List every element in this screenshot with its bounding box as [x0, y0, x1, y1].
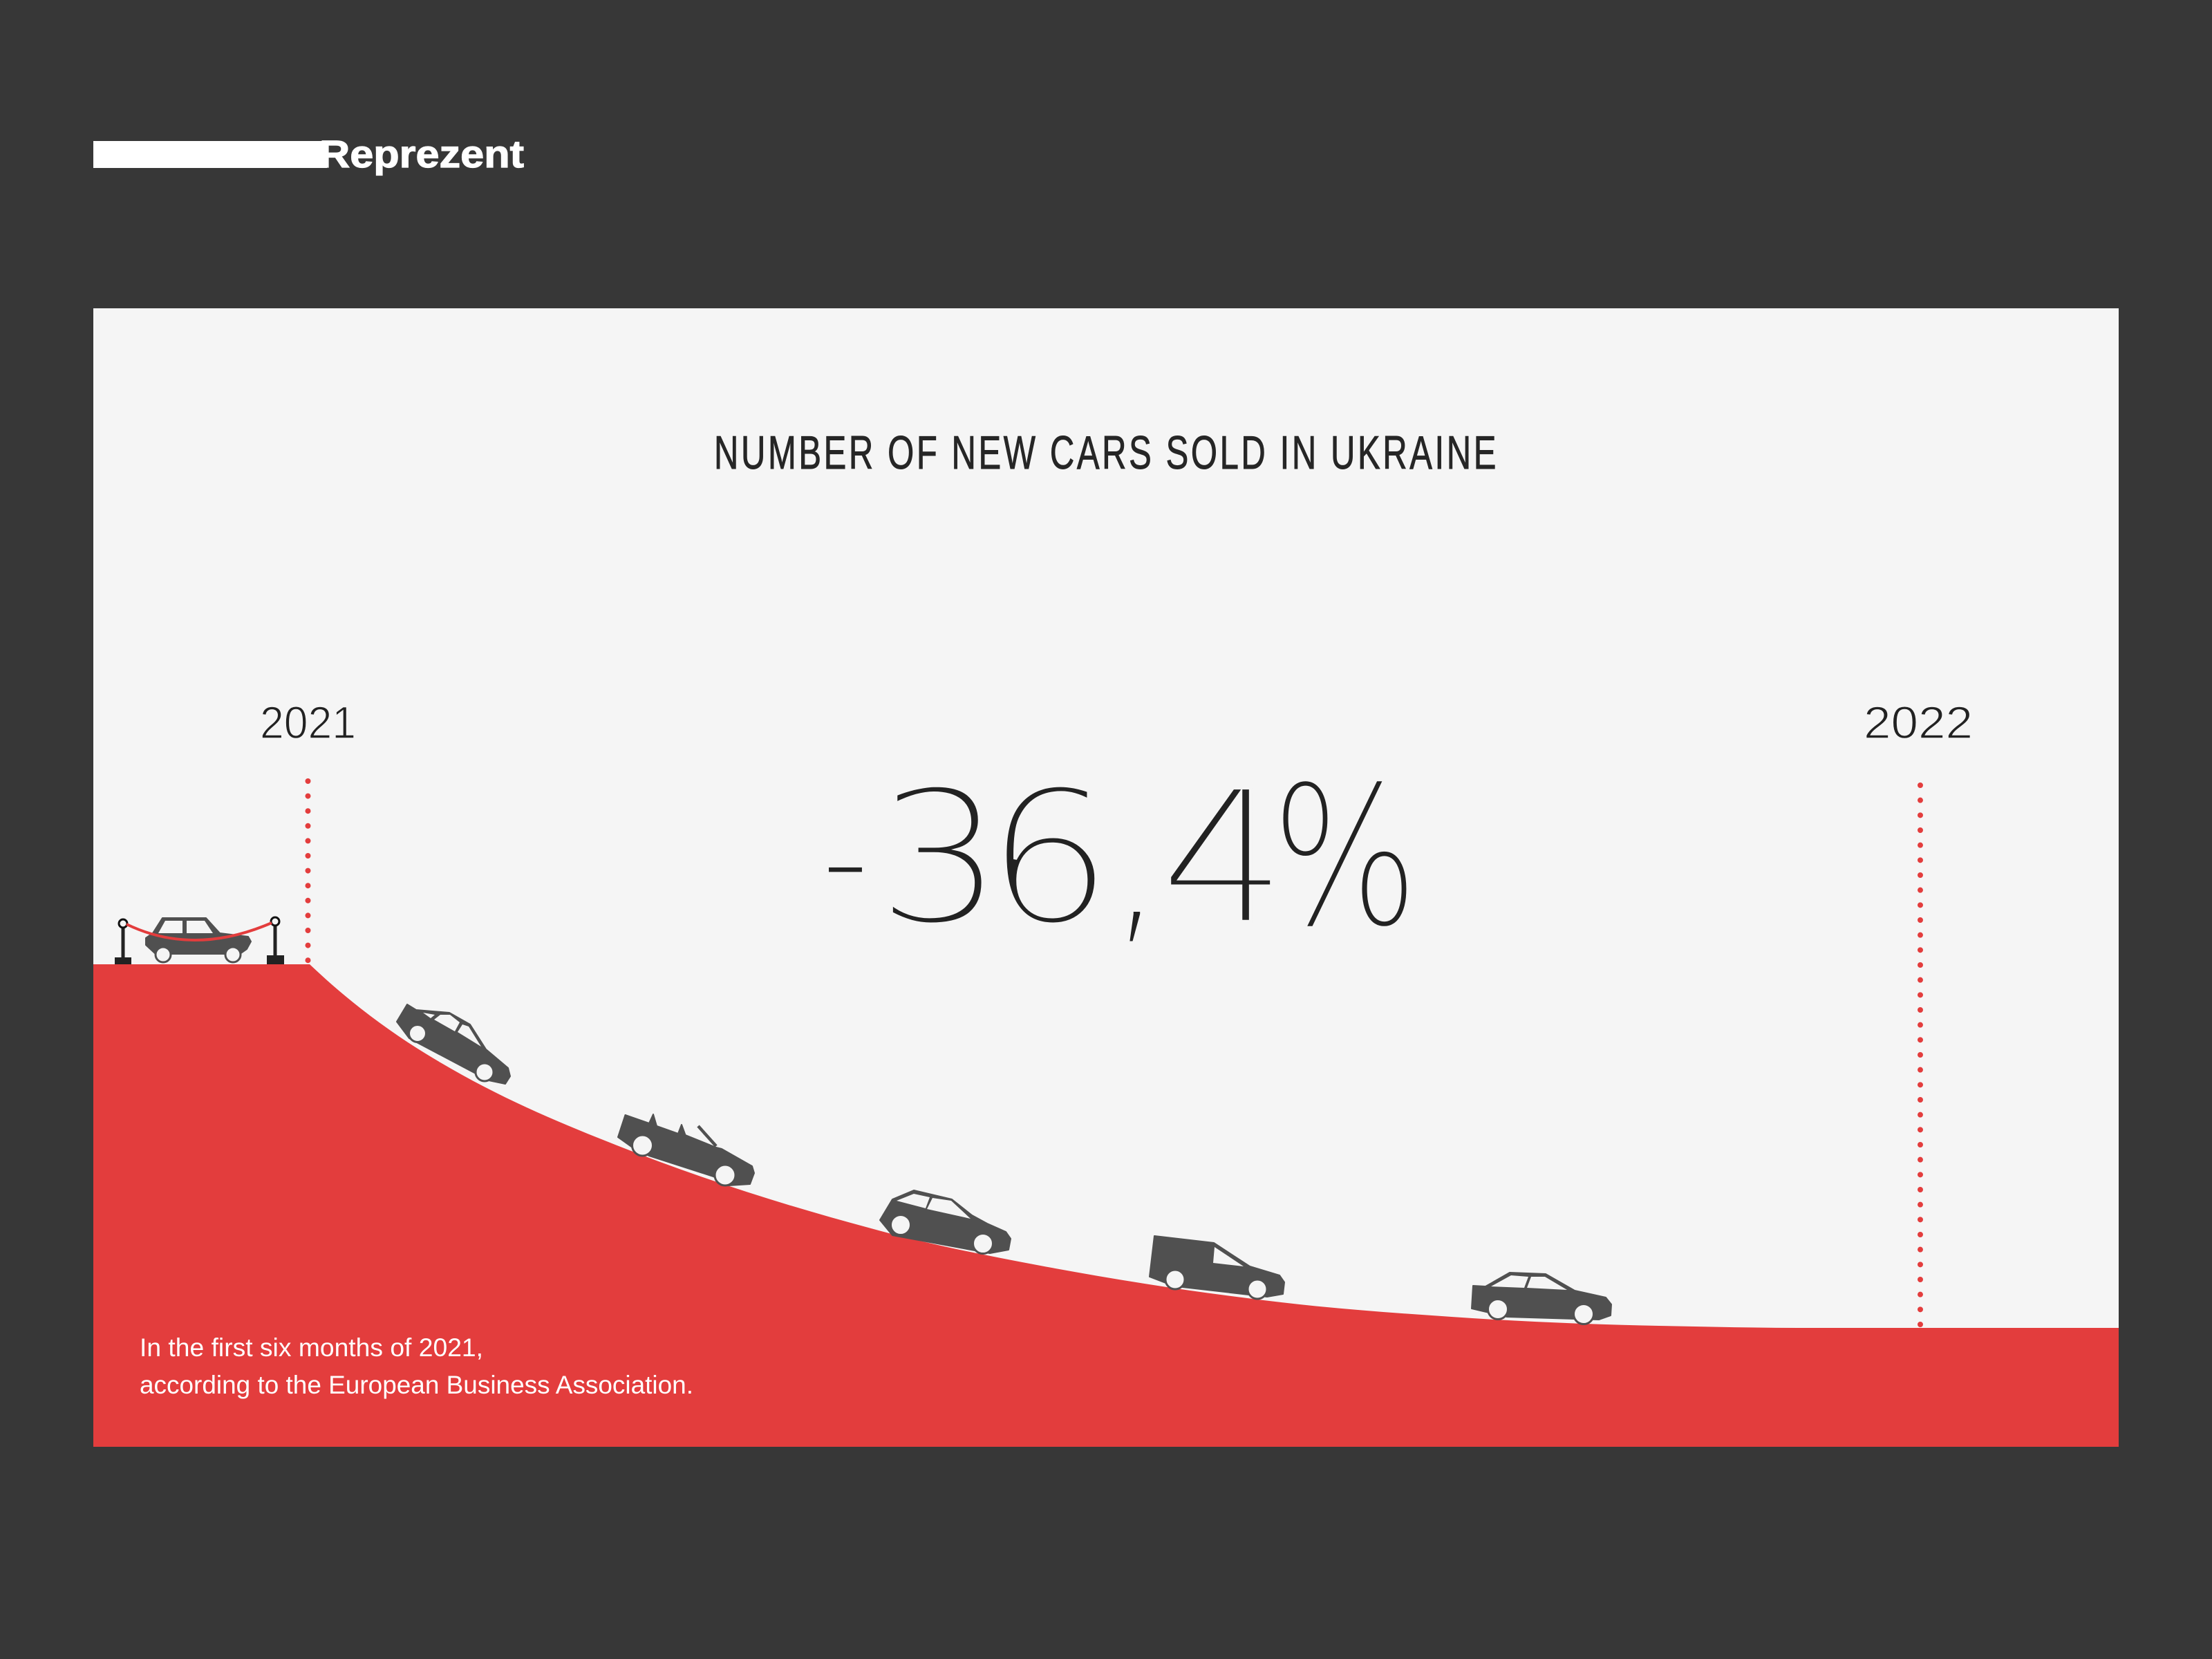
icon: van on slope [1150, 1236, 1284, 1299]
logo: Reprezent [319, 132, 524, 176]
year label 2021: 2021 [260, 697, 356, 748]
source note: according to the European Business Association. [140, 1371, 693, 1399]
icon: coupe on slope [1472, 1273, 1611, 1324]
year label 2022: 2022 [1864, 697, 1973, 748]
headline percentage [821, 744, 1419, 971]
source note: In the first six months of 2021, [140, 1333, 483, 1362]
icon: hatchback on slope [880, 1190, 1011, 1254]
panel: chart background [93, 308, 2119, 1447]
dotted marker 2022 [1918, 785, 1923, 1326]
headline percentage: % [1271, 744, 1419, 971]
logo [93, 132, 524, 176]
headline percentage: 36,4 [876, 751, 1288, 965]
title: NUMBER OF NEW CARS SOLD IN UKRAINE [714, 427, 1499, 479]
icon: sedan on slope [397, 1004, 510, 1084]
source note [140, 1333, 693, 1399]
icon: convertible on slope [618, 1114, 754, 1185]
dotted marker 2021 [306, 781, 311, 962]
icon: showroom car behind rope [115, 917, 284, 964]
declining sales curve area [93, 964, 2119, 1447]
headline percentage: - [821, 745, 870, 968]
